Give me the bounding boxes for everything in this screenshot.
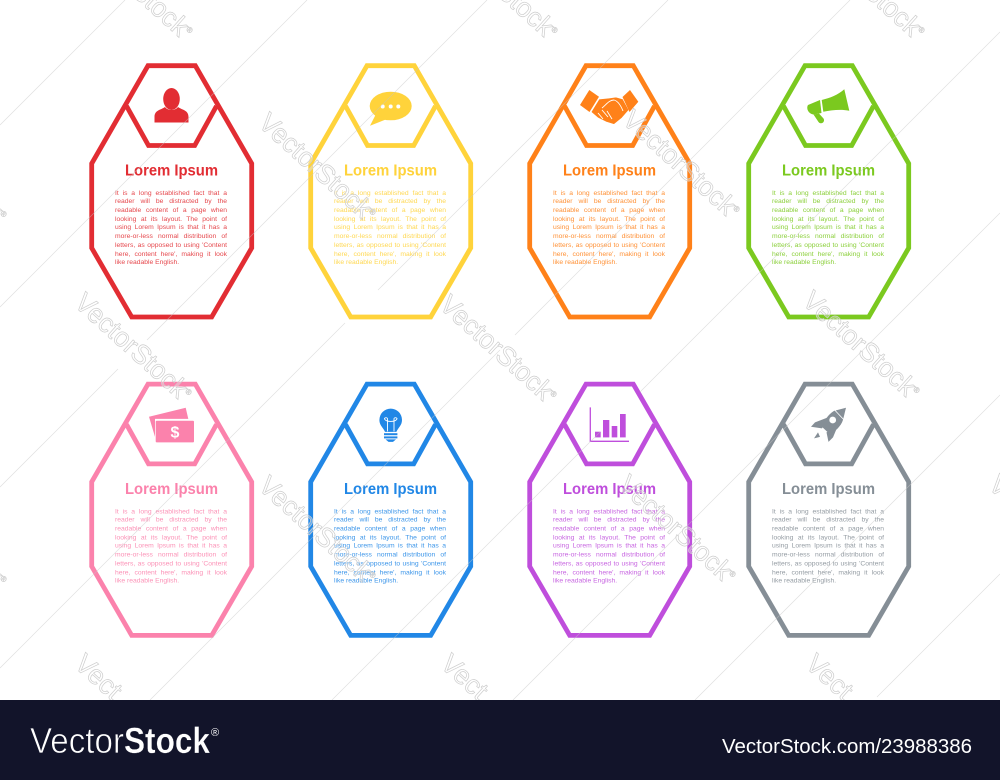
hexagon lower edge xyxy=(346,106,436,146)
body text: more-or-less normal distribution of xyxy=(115,551,227,558)
body text xyxy=(115,190,229,270)
body text: like readable English. xyxy=(772,578,836,585)
body text: like readable English. xyxy=(772,259,836,266)
body text: more-or-less normal distribution of xyxy=(772,551,884,558)
hexagon lower edge xyxy=(784,106,874,146)
hexagon lower edge xyxy=(564,106,654,146)
body text: looking at its layout. The point of xyxy=(553,216,665,223)
body text xyxy=(334,190,448,270)
heading: Lorem Ipsum xyxy=(344,481,437,498)
panel: green megaphone xyxy=(749,66,909,317)
octagon frame xyxy=(311,66,471,317)
body text: readable content of a page when xyxy=(334,525,446,532)
body text: using Lorem Ipsum is that it has a xyxy=(115,224,227,231)
icon: handshake xyxy=(580,90,638,124)
body text: like readable English. xyxy=(115,578,179,585)
body text xyxy=(115,508,229,588)
body text xyxy=(553,508,667,588)
body text: readable content of a page when xyxy=(553,525,665,532)
body text: more-or-less normal distribution of xyxy=(334,233,446,240)
watermark: ® xyxy=(367,207,378,217)
octagon frame xyxy=(749,66,909,317)
body text: readable content of a page when xyxy=(334,207,446,214)
body text: looking at its layout. The point of xyxy=(772,534,884,541)
body text: reader will be distracted by the xyxy=(553,517,665,524)
watermark: ® xyxy=(549,25,560,35)
watermark: VectorStock xyxy=(434,289,561,408)
octagon frame xyxy=(92,66,252,317)
body text: using Lorem Ipsum is that it has a xyxy=(334,224,446,231)
octagon frame xyxy=(530,384,690,635)
body text: letters, as opposed to using 'Content xyxy=(115,560,227,567)
octagon frame xyxy=(749,384,909,635)
icon: person xyxy=(154,88,188,122)
watermark: Vect xyxy=(800,648,859,706)
watermark: Vect xyxy=(435,648,494,706)
body text xyxy=(772,508,886,588)
body text: It is a long established fact that a xyxy=(553,190,665,196)
body text: It is a long established fact that a xyxy=(334,508,446,515)
heading: Lorem Ipsum xyxy=(563,481,656,498)
panel: purple chart xyxy=(530,384,690,635)
body text: It is a long established fact that a xyxy=(772,508,884,515)
watermark: ® xyxy=(183,387,194,397)
body text: letters, as opposed to using 'Content xyxy=(772,242,884,249)
octagon frame xyxy=(311,384,471,635)
body text: looking at its layout. The point of xyxy=(115,534,227,541)
watermark: ® xyxy=(184,25,195,35)
body text: looking at its layout. The point of xyxy=(115,216,227,223)
icon: banknotes xyxy=(149,408,194,442)
watermark: VectorStock xyxy=(613,469,740,588)
watermark: Vect xyxy=(69,648,128,706)
logo: Vector xyxy=(30,720,124,761)
body text: here, content here', making it look xyxy=(334,569,446,576)
icon: banknotes: $ xyxy=(171,424,180,441)
panel: yellow chat xyxy=(311,66,471,317)
body text: It is a long established fact that a xyxy=(115,508,227,515)
body text: using Lorem Ipsum is that it has a xyxy=(772,543,884,550)
body text: looking at its layout. The point of xyxy=(772,216,884,223)
hexagon lower edge xyxy=(346,424,436,464)
icon: rocket xyxy=(811,408,846,442)
logo: Stock xyxy=(124,720,211,761)
body text: here, content here', making it look xyxy=(115,251,227,258)
heading: Lorem Ipsum xyxy=(782,481,875,498)
panel: orange handshake xyxy=(530,66,690,317)
body text: using Lorem Ipsum is that it has a xyxy=(553,543,665,550)
watermark: ® xyxy=(367,570,378,580)
body text: readable content of a page when xyxy=(115,525,227,532)
watermark: ® xyxy=(916,25,927,35)
body text: looking at its layout. The point of xyxy=(334,534,446,541)
body text: here, content here', making it look xyxy=(334,251,446,258)
icon: megaphone xyxy=(807,89,849,123)
body text: It is a long established fact that a xyxy=(772,190,884,196)
body text: more-or-less normal distribution of xyxy=(334,551,446,558)
body text: It is a long established fact that a xyxy=(553,508,665,515)
body text: letters, as opposed to using 'Content xyxy=(115,242,227,249)
body text: more-or-less normal distribution of xyxy=(553,233,665,240)
body text: more-or-less normal distribution of xyxy=(115,233,227,240)
body text: more-or-less normal distribution of xyxy=(553,551,665,558)
watermark: VectorStock xyxy=(69,287,196,406)
footer band xyxy=(0,700,1000,780)
body text: reader will be distracted by the xyxy=(334,198,446,205)
body text: readable content of a page when xyxy=(772,525,884,532)
body text: using Lorem Ipsum is that it has a xyxy=(772,224,884,231)
body text: reader will be distracted by the xyxy=(115,517,227,524)
octagon frame xyxy=(530,66,690,317)
body text xyxy=(334,508,448,588)
body text: readable content of a page when xyxy=(772,207,884,214)
body text: readable content of a page when xyxy=(115,207,227,214)
watermark: VectorStock xyxy=(617,104,744,223)
logo: ® xyxy=(211,727,219,739)
body text: here, content here', making it look xyxy=(115,569,227,576)
body text: looking at its layout. The point of xyxy=(553,534,665,541)
body text: reader will be distracted by the xyxy=(772,198,884,205)
panel: gray rocket xyxy=(749,384,909,635)
body text: reader will be distracted by the xyxy=(553,198,665,205)
heading: Lorem Ipsum xyxy=(563,162,656,180)
body text: looking at its layout. The point of xyxy=(334,216,446,223)
body text: letters, as opposed to using 'Content xyxy=(553,242,665,249)
body text: letters, as opposed to using 'Content xyxy=(772,560,884,567)
body text: like readable English. xyxy=(553,578,617,585)
body text: here, content here', making it look xyxy=(553,569,665,576)
hexagon lower edge xyxy=(784,424,874,464)
watermark: ® xyxy=(731,204,742,214)
image id: VectorStock.com/23988386 xyxy=(722,736,972,758)
body text: like readable English. xyxy=(334,259,398,266)
body text: readable content of a page when xyxy=(553,207,665,214)
body text: letters, as opposed to using 'Content xyxy=(553,560,665,567)
body text: using Lorem Ipsum is that it has a xyxy=(334,543,446,550)
body text: like readable English. xyxy=(553,259,617,266)
logo xyxy=(30,720,219,761)
body text: here, content here', making it look xyxy=(772,251,884,258)
panel: blue idea xyxy=(311,384,471,635)
panel: pink money xyxy=(92,384,252,635)
watermark: ® xyxy=(727,569,738,579)
heading: Lorem Ipsum xyxy=(782,162,875,180)
icon: light bulb xyxy=(379,409,402,442)
watermark: ® xyxy=(911,385,922,395)
body text: like readable English. xyxy=(334,578,398,585)
icon: speech bubble xyxy=(370,92,412,126)
watermark: VectorStock xyxy=(253,470,380,589)
body text: more-or-less normal distribution of xyxy=(772,233,884,240)
panel: red profile xyxy=(92,66,252,317)
body text: here, content here', making it look xyxy=(553,251,665,258)
heading: Lorem Ipsum xyxy=(344,162,437,180)
body text: It is a long established fact that a xyxy=(334,190,446,196)
hexagon lower edge xyxy=(126,424,216,464)
icon: bar chart xyxy=(590,407,629,441)
body text: using Lorem Ipsum is that it has a xyxy=(115,543,227,550)
heading: Lorem Ipsum xyxy=(125,162,218,180)
hexagon lower edge xyxy=(564,424,654,464)
body text: here, content here', making it look xyxy=(772,569,884,576)
body text: reader will be distracted by the xyxy=(334,517,446,524)
body text: letters, as opposed to using 'Content xyxy=(334,560,446,567)
watermark: ® xyxy=(548,389,559,399)
body text xyxy=(772,190,886,270)
body text: It is a long established fact that a xyxy=(115,190,227,196)
body text: using Lorem Ipsum is that it has a xyxy=(553,224,665,231)
body text: letters, as opposed to using 'Content xyxy=(334,242,446,249)
hexagon lower edge xyxy=(126,106,216,146)
watermark: VectorStock xyxy=(797,285,924,404)
body text xyxy=(553,190,667,270)
body text: like readable English. xyxy=(115,259,179,266)
octagon frame xyxy=(92,384,252,635)
watermark: VectorStock xyxy=(253,107,380,226)
body text: reader will be distracted by the xyxy=(115,198,227,205)
heading: Lorem Ipsum xyxy=(125,481,218,498)
body text: reader will be distracted by the xyxy=(772,517,884,524)
